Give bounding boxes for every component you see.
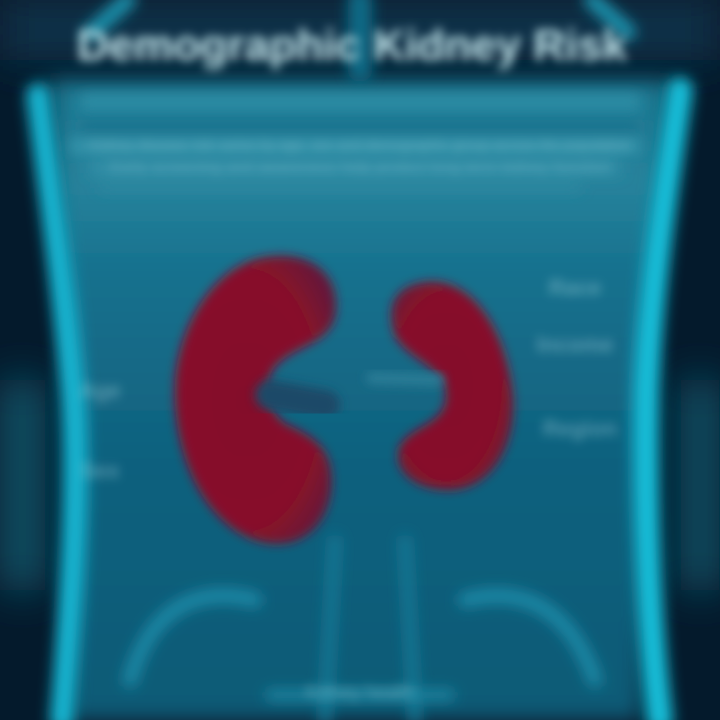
title: Demographic Kidney Risk bbox=[77, 21, 628, 70]
icon: renal vessels bbox=[270, 378, 438, 405]
subtitle text: Early screening and awareness help protect long term kidney function bbox=[110, 159, 610, 176]
icon: left kidney bbox=[175, 256, 336, 544]
torso bbox=[50, 80, 670, 720]
footer label: Kidney health bbox=[305, 682, 415, 702]
left labels: Age bbox=[79, 378, 121, 403]
right labels: Region bbox=[543, 416, 617, 441]
right labels: Income bbox=[536, 332, 614, 357]
left labels bbox=[79, 378, 121, 483]
left labels: Sex bbox=[80, 458, 120, 483]
right labels: Race bbox=[549, 275, 601, 300]
right labels bbox=[536, 275, 617, 441]
subtitle text bbox=[90, 137, 630, 176]
subtitle text: Kidney disease risk varies by age, sex and demographic group across the population bbox=[90, 137, 630, 154]
panel: header bands bbox=[70, 94, 640, 190]
icon: right kidney bbox=[391, 282, 513, 490]
